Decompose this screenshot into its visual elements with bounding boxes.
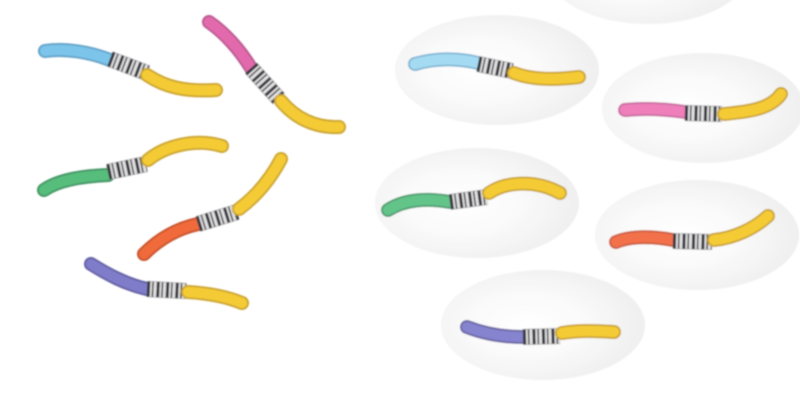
right group: encapsulated strands bbox=[375, 0, 800, 380]
strand: green bbox=[44, 143, 222, 190]
capsule: top cropped bbox=[546, 0, 750, 24]
strand: blue bbox=[45, 50, 216, 90]
capsule: green bbox=[375, 148, 579, 258]
strand: pink bbox=[209, 22, 339, 127]
strand: purple bbox=[91, 264, 242, 303]
capsule: purple bbox=[441, 270, 645, 380]
capsule: orange bbox=[595, 180, 799, 290]
capsule: pink bbox=[602, 53, 800, 163]
capsule: blue bbox=[395, 15, 599, 125]
strand: orange bbox=[144, 159, 281, 254]
left group: free strands bbox=[44, 22, 339, 303]
